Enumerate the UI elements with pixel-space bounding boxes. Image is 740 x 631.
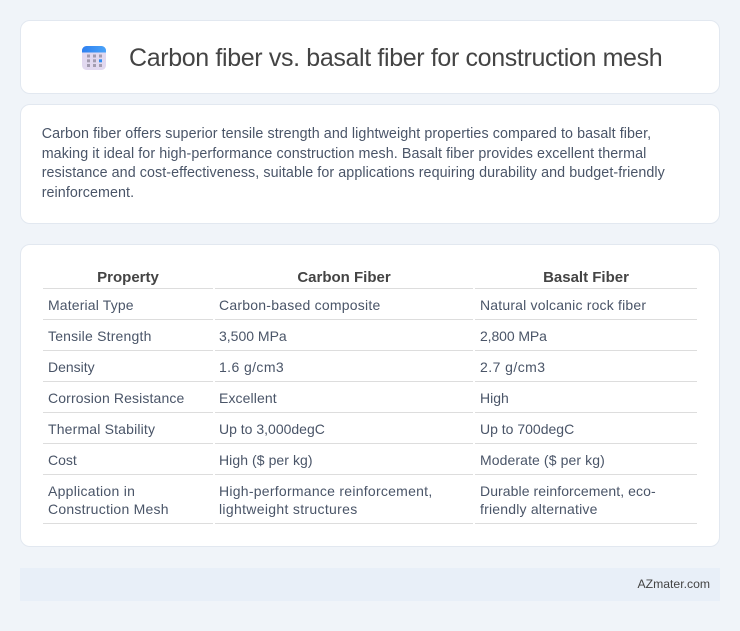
panel: comparison table: Durable reinforcement, eco- <box>480 483 656 499</box>
description text: Carbon fiber offers superior tensile strength and lightweight properties compared to basalt fiber, <box>42 126 651 142</box>
description text: making it ideal for high-performance construction mesh. Basalt fiber provides excellent thermal <box>42 146 646 162</box>
panel: comparison table: Moderate ($ per kg) <box>480 452 605 468</box>
panel: comparison table: Up to 3,000degC <box>219 421 325 437</box>
icon: calendar <box>82 46 106 70</box>
header: Property: Property <box>97 269 159 286</box>
row: Density: Density <box>48 359 95 375</box>
panel: comparison table: High-performance reinforcement, <box>219 483 432 499</box>
row: Material Type: Material Type <box>48 297 134 313</box>
panel: comparison table: High <box>480 390 509 406</box>
panel: comparison table: Up to 700degC <box>480 421 574 437</box>
panel: description <box>20 104 720 224</box>
panel: comparison table: Carbon-based composite <box>219 297 380 313</box>
row: Thermal Stability: Thermal Stability <box>48 421 155 437</box>
description text <box>42 126 665 201</box>
panel: comparison table: 1.6 g/cm3 <box>219 359 284 375</box>
header: Carbon Fiber: Carbon Fiber <box>297 269 391 286</box>
panel: comparison table: lightweight structures <box>219 501 358 517</box>
row: Tensile Strength: Tensile Strength <box>48 328 152 344</box>
description text: reinforcement. <box>42 185 134 201</box>
panel: comparison table: Natural volcanic rock fiber <box>480 297 646 313</box>
panel: comparison table: 3,500 MPa <box>219 328 287 344</box>
description text: resistance and cost-effectiveness, suitable for applications requiring durability and budget-friendly <box>42 165 665 181</box>
panel: comparison table <box>20 244 720 547</box>
panel: comparison table: 2.7 g/cm3 <box>480 359 546 375</box>
panel: comparison table: friendly alternative <box>480 501 598 517</box>
title: Carbon fiber vs. basalt fiber for construction mesh <box>129 44 662 72</box>
panel: comparison table: High ($ per kg) <box>219 452 313 468</box>
panel: comparison table: Excellent <box>219 390 277 406</box>
footer bar <box>20 568 720 601</box>
panel: comparison table: 2,800 MPa <box>480 328 547 344</box>
row: Application in Construction Mesh <box>48 483 169 517</box>
panel: title card <box>20 20 720 94</box>
row: Corrosion Resistance: Corrosion Resistance <box>48 390 184 406</box>
row: Application in Construction Mesh: Application in <box>48 483 135 499</box>
footer credit: AZmater.com <box>638 577 710 591</box>
row: Application in Construction Mesh: Construction Mesh <box>48 501 169 517</box>
header: Basalt Fiber: Basalt Fiber <box>543 269 629 286</box>
row: Cost: Cost <box>48 452 77 468</box>
